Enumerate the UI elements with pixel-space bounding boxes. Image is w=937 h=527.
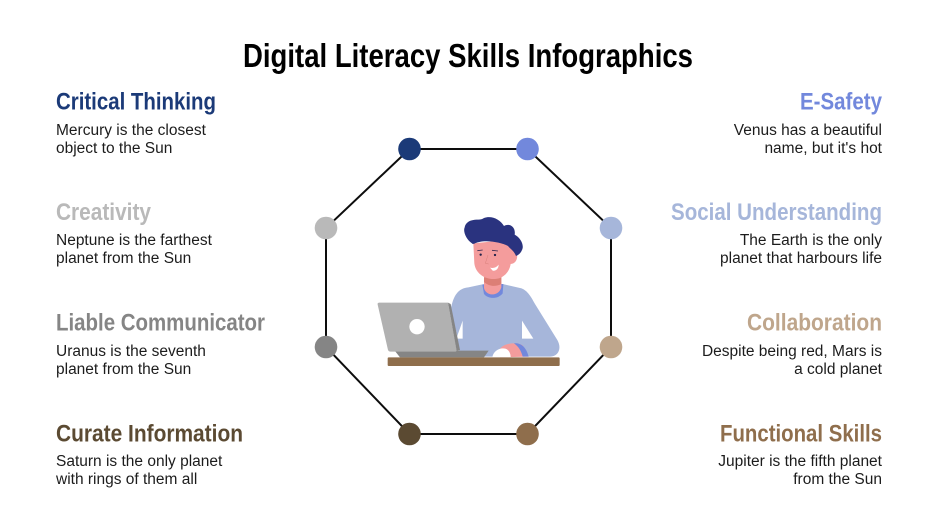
text: social understanding description: planet that harbours life	[720, 250, 882, 267]
panel: creativity	[56, 199, 213, 267]
panel: e-safety	[734, 88, 883, 157]
text: creativity description: Neptune is the farthest	[56, 232, 213, 249]
mouse	[492, 348, 511, 357]
text: e-safety description: name, but it's hot	[764, 140, 883, 157]
text: critical thinking description: Mercury is the closest	[56, 122, 207, 139]
heading: critical thinking: Critical Thinking	[56, 88, 216, 116]
text: liable communicator description: Uranus is the seventh	[56, 343, 206, 360]
node: liable communicator	[315, 336, 337, 358]
chart: octagon ring with nodes	[315, 138, 622, 445]
panel: critical thinking	[56, 88, 216, 157]
text: functional skills description: Jupiter is the fifth planet	[718, 453, 883, 470]
nose	[485, 255, 489, 264]
text: functional skills description: from the Sun	[793, 471, 882, 488]
heading: curate information: Curate Information	[56, 420, 243, 448]
heading: social understanding: Social Understanding	[671, 199, 882, 226]
text: creativity description: planet from the Sun	[56, 250, 191, 267]
hand and cuff	[500, 343, 528, 357]
text: curate information description: with rings of them all	[55, 471, 197, 488]
node: curate information	[398, 423, 421, 445]
desk	[388, 357, 560, 366]
laptop base	[395, 351, 489, 357]
text: critical thinking description: object to the Sun	[56, 140, 172, 157]
panel: liable communicator	[56, 310, 265, 378]
node: critical thinking	[398, 138, 421, 160]
text: curate information description: Saturn is the only planet	[56, 453, 223, 470]
panel: social understanding	[671, 199, 882, 267]
node: social understanding	[600, 217, 622, 239]
face	[473, 240, 517, 279]
sweater	[451, 284, 559, 357]
text: e-safety description: Venus has a beautiful	[734, 122, 882, 139]
heading: liable communicator: Liable Communicator	[56, 310, 265, 336]
node: functional skills	[516, 423, 539, 445]
heading: collaboration: Collaboration	[747, 310, 882, 336]
text: collaboration description: a cold planet	[794, 361, 883, 378]
text: liable communicator description: planet from the Sun	[56, 361, 191, 378]
text: social understanding description: The Earth is the only	[740, 232, 882, 249]
node: collaboration	[600, 336, 622, 358]
heading: e-safety: E-Safety	[800, 88, 882, 116]
collar	[482, 284, 503, 298]
panel: collaboration	[702, 310, 883, 378]
eyes and brows	[479, 253, 482, 256]
heading: functional skills: Functional Skills	[720, 420, 882, 448]
illustration: person at laptop	[378, 217, 560, 366]
text: collaboration description: Despite being red, Mars is	[702, 343, 882, 360]
node: creativity	[315, 217, 337, 239]
panel: functional skills	[718, 420, 883, 488]
hair	[464, 217, 523, 256]
panel: curate information	[55, 420, 243, 488]
heading: creativity: Creativity	[56, 199, 151, 226]
title: Digital Literacy Skills Infographics	[243, 37, 693, 74]
laptop logo	[409, 319, 425, 334]
node: e-safety	[516, 138, 539, 160]
smile	[490, 265, 499, 271]
arm gaps	[456, 321, 463, 339]
laptop screen	[378, 303, 457, 352]
neck	[484, 275, 501, 294]
